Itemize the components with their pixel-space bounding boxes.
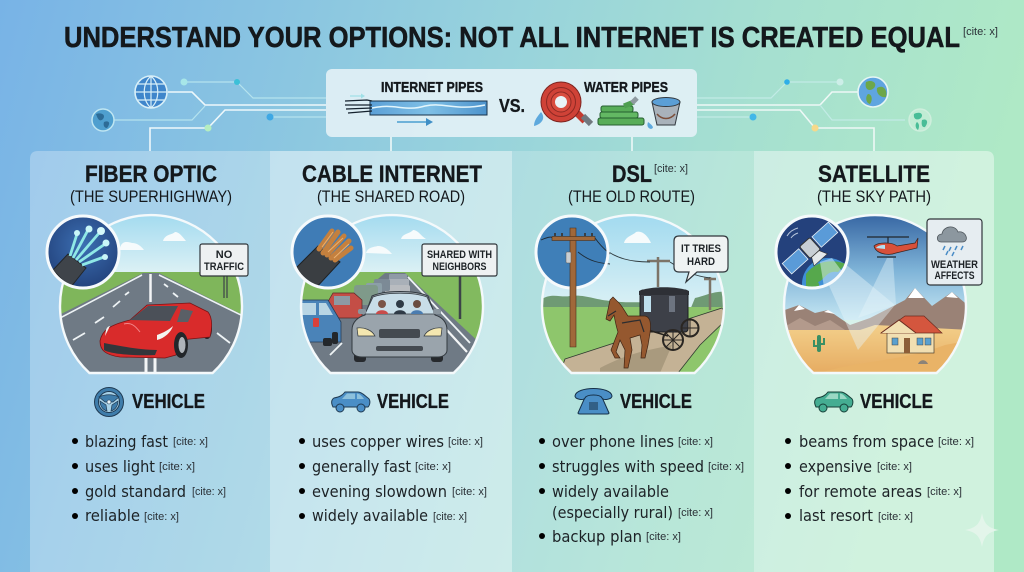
list: fiber attributes: [cite: x] [173, 436, 208, 448]
icon: steering wheel [94, 388, 124, 416]
label: vehicle: VEHICLE [132, 391, 205, 413]
horse and carriage [606, 287, 698, 368]
list: satellite attributes: last resort [799, 506, 873, 525]
sign: shared with neighbors [422, 244, 497, 319]
list: satellite attributes: [cite: x] [927, 486, 962, 498]
list: dsl attributes: [cite: x] [678, 436, 713, 448]
title: [cite: x] [963, 26, 998, 38]
icon: green car [815, 392, 853, 412]
list: cable attributes: [cite: x] [433, 511, 467, 523]
icon: rotary telephone [575, 388, 612, 414]
list: dsl attributes: struggles with speed [552, 457, 704, 476]
callout: it tries hard [674, 236, 728, 282]
panel: cable internet [270, 151, 512, 572]
list: cable attributes: uses copper wires [312, 432, 444, 451]
label: vehicle: VEHICLE [620, 391, 692, 413]
list: satellite attributes: beams from space [799, 432, 934, 451]
illustration: traffic jam [292, 210, 497, 373]
heading: satellite: (THE SKY PATH) [817, 188, 931, 206]
icon: blue car [332, 392, 370, 412]
inset: telephone pole circle [536, 216, 610, 288]
icon: grid globe [135, 76, 167, 108]
list: cable attributes: [cite: x] [415, 461, 451, 473]
right circuit lines and globes [697, 77, 931, 151]
list: cable attributes [299, 432, 487, 525]
list: cable attributes: widely available [312, 506, 428, 525]
heading: cable internet: CABLE INTERNET [302, 161, 482, 188]
heading: cable internet: (THE SHARED ROAD) [317, 188, 465, 206]
connector stems [391, 137, 632, 151]
heading: fiber optic: (THE SUPERHIGHWAY) [70, 188, 232, 206]
left circuit lines and globes [92, 76, 326, 151]
heading: dsl: [cite: x] [654, 163, 688, 175]
list: dsl attributes: [cite: x] [646, 531, 681, 543]
label: internet pipes: INTERNET PIPES [381, 79, 483, 96]
icon: green garden hose [598, 98, 653, 129]
list: dsl attributes: (especially rural) [552, 503, 673, 522]
list: satellite attributes: [cite: x] [938, 436, 974, 448]
list: satellite attributes: [cite: x] [878, 511, 913, 523]
list: fiber attributes: uses light [85, 457, 155, 476]
panel: fiber optic [30, 151, 270, 572]
panel: dsl [512, 151, 754, 572]
heading: fiber optic [70, 161, 232, 206]
icon: internet pipe [345, 94, 487, 126]
label: vehicle: VEHICLE [377, 391, 449, 413]
car [100, 303, 212, 358]
heading: dsl: (THE OLD ROUTE) [568, 188, 695, 206]
list: dsl attributes [539, 432, 744, 546]
label: water pipes: WATER PIPES [584, 79, 668, 96]
sign: weather affects: AFFECTS [934, 270, 974, 282]
heading: satellite [817, 161, 931, 206]
list: fiber attributes [72, 432, 226, 525]
sign: no traffic: NO [216, 249, 233, 261]
heading: dsl: DSL [612, 161, 652, 188]
list: fiber attributes: blazing fast [85, 432, 168, 451]
list: dsl attributes: backup plan [552, 527, 642, 546]
illustration: sports car on open highway [47, 210, 248, 373]
house [881, 316, 942, 353]
illustration: satellite beam over desert house [776, 210, 982, 373]
gray car with passengers [352, 292, 447, 362]
telephone pole [552, 228, 595, 347]
list: fiber attributes: gold standard [85, 482, 186, 501]
list: satellite attributes: for remote areas [799, 482, 922, 501]
icon: pale globe [909, 109, 931, 131]
icon: small globe [92, 109, 114, 131]
callout: it tries hard: HARD [687, 256, 715, 268]
list: satellite attributes: [cite: x] [877, 461, 912, 473]
helicopter [867, 237, 918, 257]
sign: shared with neighbors: SHARED WITH [427, 249, 492, 261]
sign: weather affects [927, 219, 982, 285]
heading: dsl [568, 161, 695, 206]
heading: fiber optic: FIBER OPTIC [85, 161, 217, 188]
heading: cable internet [302, 161, 482, 206]
list: fiber attributes: reliable [85, 506, 140, 525]
list: dsl attributes: [cite: x] [678, 507, 713, 519]
sign: shared with neighbors: NEIGHBORS [432, 261, 486, 273]
icon: earth globe [858, 77, 888, 107]
inset: satellite and earth [774, 214, 850, 290]
icon: bucket [652, 98, 680, 125]
label: versus: VS. [499, 96, 525, 116]
list: dsl attributes: widely available [552, 482, 669, 501]
callout: it tries hard: IT TRIES [681, 243, 721, 255]
sign: weather affects: WEATHER [931, 259, 978, 271]
inset: glowing fiber cable [47, 216, 119, 288]
list: dsl attributes: [cite: x] [708, 461, 744, 473]
list: cable attributes: evening slowdown [312, 482, 447, 501]
sign: no traffic [200, 244, 248, 298]
icon: red fire hose [534, 82, 591, 126]
panel: satellite [754, 151, 994, 572]
list: cable attributes: [cite: x] [448, 436, 483, 448]
list: cable attributes: generally fast [312, 457, 411, 476]
list: dsl attributes: over phone lines [552, 432, 674, 451]
list: cable attributes: [cite: x] [452, 486, 487, 498]
comparison panel: internet pipes vs water pipes [326, 69, 697, 137]
list: fiber attributes: [cite: x] [144, 511, 179, 523]
label: vehicle: VEHICLE [860, 391, 933, 413]
list: fiber attributes: [cite: x] [159, 461, 195, 473]
illustration: horse and buggy on dirt road [536, 210, 729, 373]
heading: satellite: SATELLITE [818, 161, 930, 188]
sign: no traffic: TRAFFIC [204, 261, 244, 273]
list: satellite attributes [785, 432, 974, 525]
inset: copper cable [292, 216, 364, 290]
list: fiber attributes: [cite: x] [192, 486, 226, 498]
list: satellite attributes: expensive [799, 457, 872, 476]
icon: sparkle [965, 513, 999, 547]
